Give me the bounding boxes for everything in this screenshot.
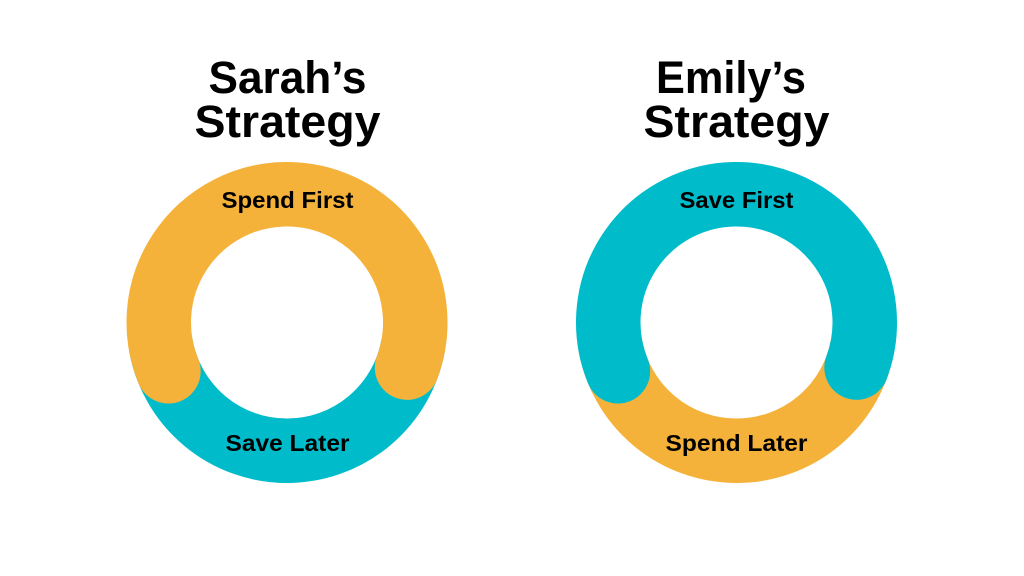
label: Save Later: Save Later xyxy=(226,430,350,456)
ring segment: save later xyxy=(161,345,413,451)
donut: Sarah xyxy=(159,187,415,456)
label: Save First: Save First xyxy=(680,187,794,213)
panel: Emily's strategy xyxy=(608,52,865,456)
donut: Emily xyxy=(608,187,865,456)
ring segment: spend first xyxy=(159,194,415,371)
panel: Sarah's strategy xyxy=(159,52,415,456)
ring segment: save first xyxy=(608,194,865,371)
heading: Emily's Strategy xyxy=(644,52,830,147)
heading: Emily's Strategy: Strategy xyxy=(644,96,830,147)
label: Spend First: Spend First xyxy=(222,187,354,213)
label: Spend Later: Spend Later xyxy=(666,430,808,456)
heading: Emily's Strategy: Emily’s xyxy=(656,52,806,103)
heading: Sarah's Strategy xyxy=(194,52,380,147)
ring segment: spend later xyxy=(610,345,863,451)
heading: Sarah's Strategy: Sarah’s xyxy=(208,52,366,103)
heading: Sarah's Strategy: Strategy xyxy=(194,96,380,147)
